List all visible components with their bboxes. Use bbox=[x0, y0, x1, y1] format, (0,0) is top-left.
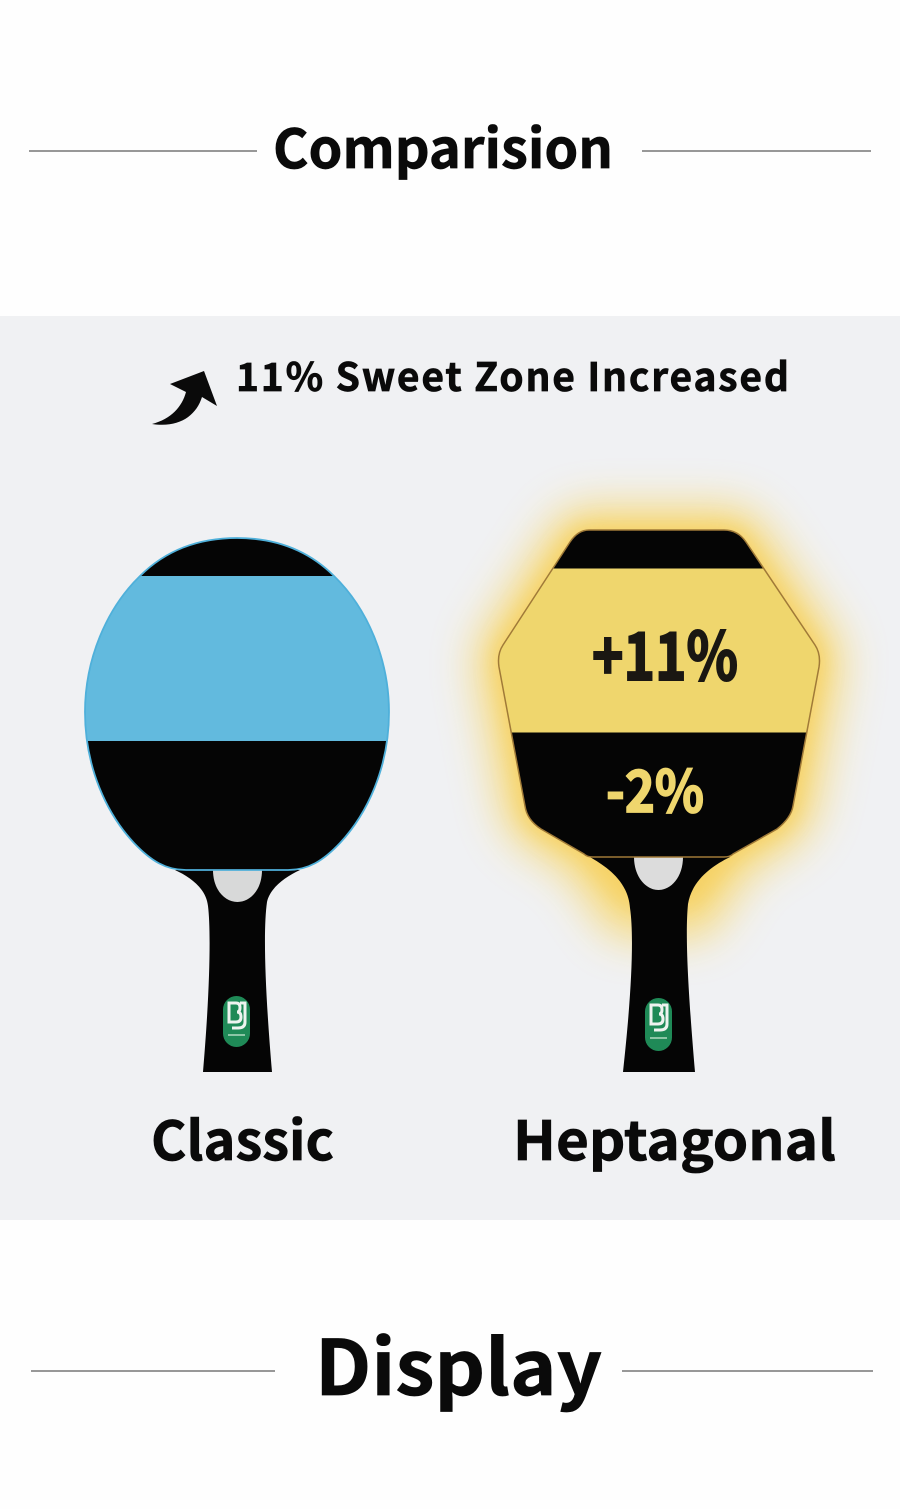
heading: Comparision: Comparision bbox=[273, 105, 613, 184]
label: Heptagonal: Heptagonal bbox=[513, 1097, 836, 1176]
heptagonal logo badge bbox=[645, 998, 672, 1051]
classic blade bbox=[80, 530, 395, 876]
callout: sweet zone increase: 11% Sweet Zone Increased bbox=[236, 347, 789, 403]
paddle: heptagonal bbox=[490, 525, 830, 1072]
heptagonal glow bbox=[498, 530, 820, 915]
heptagonal finger rest bbox=[634, 857, 683, 890]
heading: Display: Display bbox=[315, 1307, 602, 1417]
classic handle bbox=[175, 870, 300, 1072]
label: Classic: Classic bbox=[151, 1097, 334, 1176]
classic logo badge bbox=[223, 996, 250, 1047]
paddle: classic bbox=[80, 530, 395, 1072]
classic finger rest bbox=[213, 870, 262, 902]
heptagonal handle bbox=[590, 857, 730, 1072]
label: -2%: -2% bbox=[606, 745, 704, 829]
icon: upward arrow bbox=[152, 371, 217, 425]
panel: comparison background bbox=[0, 316, 900, 1220]
label: +11%: +11% bbox=[592, 604, 738, 700]
heptagonal blade bbox=[490, 525, 830, 865]
